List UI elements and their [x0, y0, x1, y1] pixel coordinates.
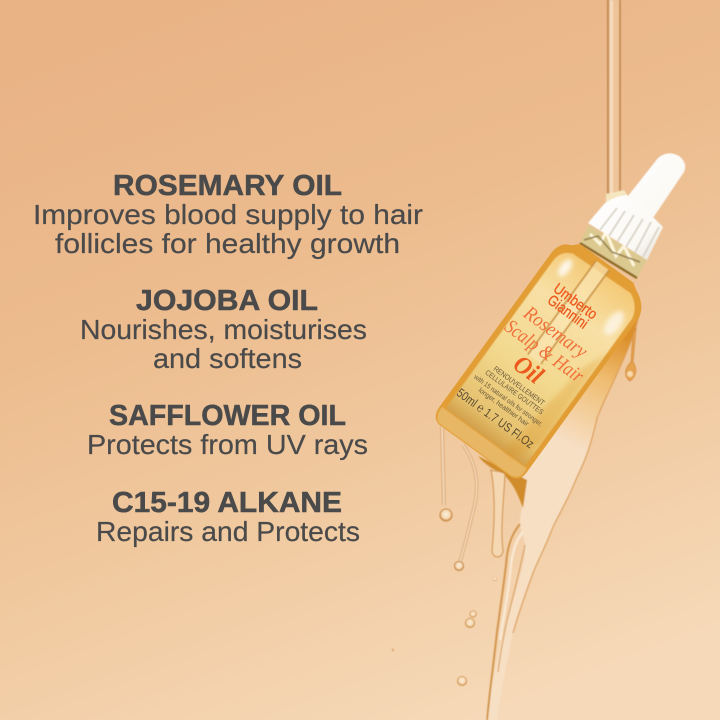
ingredient: jojoba oil: Nourishes, moisturises	[80, 314, 367, 345]
white glass highlights	[544, 257, 635, 339]
bottle label	[454, 270, 621, 451]
inner oil fill	[446, 245, 644, 466]
oil drips and droplets	[392, 328, 636, 686]
dropper bottle	[431, 153, 685, 483]
ingredient: rosemary oil: ROSEMARY OIL	[113, 170, 342, 202]
bottle label: Scalp & Hair	[500, 315, 588, 387]
white ribbed collar	[588, 195, 663, 260]
bottle glass body	[431, 233, 654, 483]
ingredient: jojoba oil: JOJOBA OIL	[136, 285, 318, 317]
bottle label: CELLULAIRE GOUTTES	[483, 368, 545, 416]
amber reflection near right edge	[503, 337, 607, 468]
bottle label: RENOUVELLEMENT	[492, 364, 547, 407]
ingredient: safflower oil: Protects from UV rays	[87, 429, 368, 460]
ingredient: c15-19 alkane	[96, 487, 360, 547]
bottle label: Giannini	[544, 292, 591, 333]
ingredient: c15-19 alkane: Repairs and Protects	[96, 516, 360, 547]
white rubber teat	[628, 153, 685, 218]
bottle label: Umberto	[550, 280, 600, 323]
ingredient: safflower oil	[87, 400, 368, 460]
ingredient list	[33, 170, 423, 547]
ingredient: jojoba oil: and softens	[153, 343, 302, 374]
bottle label: with 15 natural oils for stronger,	[472, 373, 544, 428]
bottle base band	[433, 407, 527, 481]
ingredient: c15-19 alkane: C15-19 ALKANE	[112, 487, 342, 519]
bottle label: Rosemary	[519, 301, 591, 363]
bottle label: 50ml ℮ 1.7 US Fl.Oz	[454, 386, 537, 451]
dropper tube	[527, 260, 610, 364]
ingredient: rosemary oil	[33, 170, 423, 259]
large oil stream below bottle	[478, 310, 640, 720]
bottle label: longer, healthier hair	[477, 387, 530, 428]
ingredient: safflower oil: SAFFLOWER OIL	[109, 400, 346, 432]
ingredient: rosemary oil: follicles for healthy growth	[55, 228, 400, 259]
glass neck	[580, 225, 647, 278]
bottle label: Oil	[508, 350, 548, 390]
ingredient: jojoba oil	[80, 285, 367, 374]
oil stream falling onto dropper	[606, 0, 628, 204]
ingredient: rosemary oil: Improves blood supply to hair	[33, 199, 423, 230]
